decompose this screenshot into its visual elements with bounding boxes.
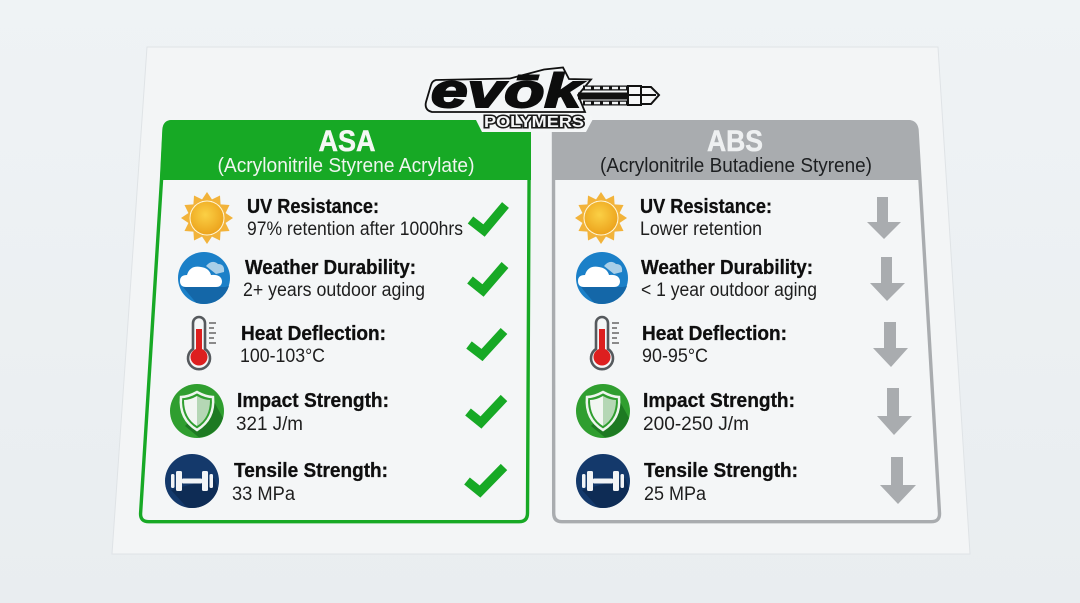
UV value: 97% retention after 1000hrs — [247, 219, 463, 240]
impact label: Impact Strength: — [237, 389, 389, 412]
logo subtitle: POLYMERS — [484, 114, 584, 131]
weather value: < 1 year outdoor aging — [641, 280, 817, 301]
icon: check — [467, 467, 504, 492]
ABS title: ABS — [707, 125, 763, 158]
logo wordmark: evōk — [431, 64, 585, 117]
ASA panel frame — [141, 122, 529, 522]
icon: sun — [575, 192, 627, 244]
icon: thermometer — [591, 317, 619, 369]
icon: down arrow — [867, 197, 901, 239]
weather value: 2+ years outdoor aging — [243, 280, 425, 301]
tensile label: Tensile Strength: — [234, 459, 388, 482]
paper sheet — [112, 47, 970, 554]
row: tensile strength — [576, 454, 916, 508]
ABS header — [552, 120, 921, 180]
row: UV resistance — [575, 192, 901, 244]
heat value: 90-95°C — [642, 346, 708, 367]
row: heat deflection — [188, 317, 504, 369]
row: impact strength — [576, 384, 912, 438]
heat label: Heat Deflection: — [241, 322, 386, 345]
ABS subtitle: (Acrylonitrile Butadiene Styrene) — [600, 155, 872, 177]
icon: check — [470, 265, 505, 290]
icon: thermometer — [188, 317, 216, 369]
impact value: 321 J/m — [236, 414, 303, 435]
icon: dumbbell — [576, 454, 630, 508]
ASA subtitle: (Acrylonitrile Styrene Acrylate) — [218, 155, 474, 177]
row: impact strength — [170, 384, 504, 438]
icon: check — [469, 331, 504, 355]
tensile value: 33 MPa — [232, 484, 295, 505]
UV value: Lower retention — [640, 219, 762, 240]
ASA title: ASA — [318, 125, 376, 158]
heat value: 100-103°C — [240, 346, 325, 367]
impact label: Impact Strength: — [643, 389, 795, 412]
icon: down arrow — [877, 388, 912, 435]
weather label: Weather Durability: — [245, 256, 416, 279]
logo: Evok Polymers — [422, 64, 659, 132]
weather label: Weather Durability: — [641, 256, 813, 279]
icon: check — [468, 398, 504, 422]
icon: sun — [181, 192, 233, 244]
icon: down arrow — [870, 257, 905, 301]
tensile label: Tensile Strength: — [644, 459, 798, 482]
icon: dumbbell — [165, 454, 219, 508]
heat label: Heat Deflection: — [642, 322, 787, 345]
UV label: UV Resistance: — [640, 195, 772, 218]
ABS panel frame — [554, 122, 940, 522]
row: weather durability — [576, 252, 905, 304]
icon: down arrow — [873, 322, 908, 367]
panel: ASA — [141, 120, 531, 522]
ASA header — [160, 120, 531, 180]
row: tensile strength — [165, 454, 504, 508]
row: weather durability — [178, 252, 505, 304]
UV label: UV Resistance: — [247, 195, 379, 218]
icon: check — [470, 205, 506, 230]
tensile value: 25 MPa — [644, 484, 706, 505]
icon: cloud — [576, 252, 628, 304]
logo sticker — [422, 64, 594, 132]
logo bolt — [578, 86, 659, 105]
panel: ABS — [552, 120, 940, 522]
row: UV resistance — [181, 192, 506, 244]
icon: down arrow — [880, 457, 916, 504]
icon: cloud — [178, 252, 230, 304]
icon: shield — [576, 384, 630, 438]
row: heat deflection — [591, 317, 908, 369]
impact value: 200-250 J/m — [643, 414, 749, 435]
icon: shield — [170, 384, 224, 438]
